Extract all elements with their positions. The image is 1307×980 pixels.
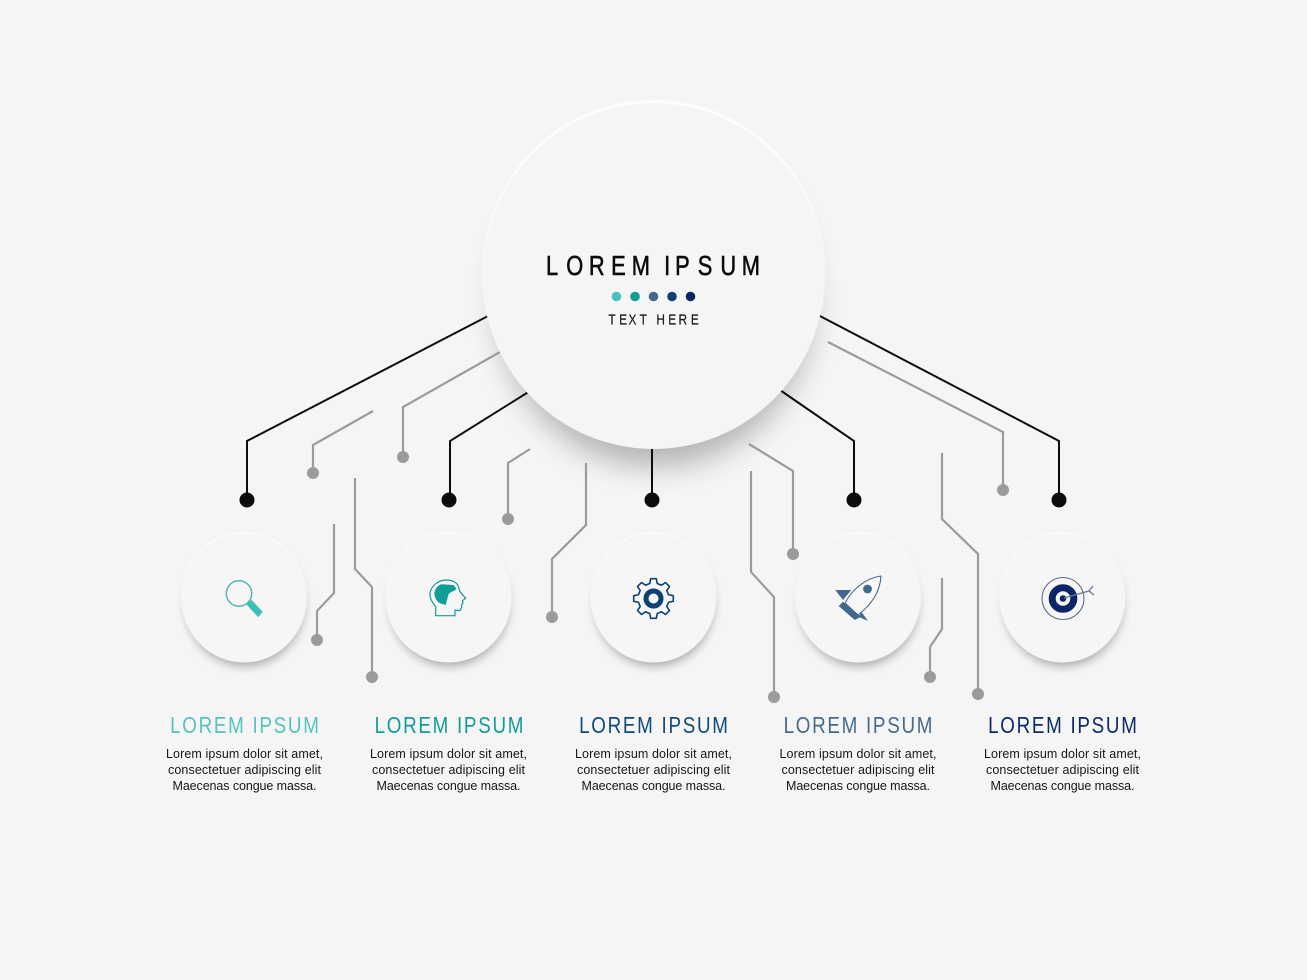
circle 5	[1000, 532, 1125, 666]
panel: central circle	[482, 100, 824, 449]
text block 2	[370, 747, 527, 793]
heading 4: LOREM IPSUM	[784, 712, 932, 739]
text block 4: Lorem ipsum dolor sit amet,	[780, 747, 936, 761]
heading 3: LOREM IPSUM	[579, 712, 728, 739]
circle 3	[591, 532, 716, 666]
panel: step 3	[575, 532, 732, 793]
text block 3: Lorem ipsum dolor sit amet,	[575, 747, 732, 761]
main circle drop shadow	[498, 138, 812, 466]
connector lines: grey circuit traces	[307, 342, 1009, 703]
main title: LOREM IPSUM	[546, 250, 760, 282]
colour dots	[612, 292, 695, 301]
text block 4	[780, 747, 936, 793]
text block 1: Maecenas congue massa.	[172, 779, 316, 793]
text block 2: Maecenas congue massa.	[376, 779, 520, 793]
panel: step 1	[166, 532, 323, 793]
text block 3: consectetuer adipiscing elit	[577, 763, 731, 777]
connector lines: black links to steps	[240, 315, 1066, 508]
circle 4	[796, 532, 920, 666]
circle 1	[182, 532, 306, 666]
text block 5: Lorem ipsum dolor sit amet,	[984, 747, 1141, 761]
text block 4: Maecenas congue massa.	[786, 779, 930, 793]
heading 2: LOREM IPSUM	[375, 712, 523, 739]
heading 5: LOREM IPSUM	[988, 712, 1137, 739]
text block 5	[984, 747, 1141, 793]
icon: head with brain	[430, 580, 466, 616]
text block 1: consectetuer adipiscing elit	[168, 763, 322, 777]
text block 5: consectetuer adipiscing elit	[986, 763, 1140, 777]
icon: target with arrow	[1042, 578, 1094, 620]
text block 3	[575, 747, 732, 793]
text block 3: Maecenas congue massa.	[582, 779, 726, 793]
text block 2: consectetuer adipiscing elit	[372, 763, 526, 777]
text block 1	[166, 747, 323, 793]
panel: step 4	[780, 532, 936, 793]
panel: step 5	[984, 532, 1141, 793]
text block 4: consectetuer adipiscing elit	[782, 763, 935, 777]
circle 2	[386, 532, 511, 666]
panel: step 2	[370, 532, 527, 793]
icon: rocket	[835, 576, 881, 621]
text block 1: Lorem ipsum dolor sit amet,	[166, 747, 323, 761]
icon: gear	[634, 579, 673, 618]
subtitle: TEXT HERE	[608, 311, 699, 328]
icon: magnifying glass	[226, 581, 263, 617]
text block 2: Lorem ipsum dolor sit amet,	[370, 747, 527, 761]
heading 1: LOREM IPSUM	[170, 712, 319, 739]
text block 5: Maecenas congue massa.	[990, 779, 1134, 793]
